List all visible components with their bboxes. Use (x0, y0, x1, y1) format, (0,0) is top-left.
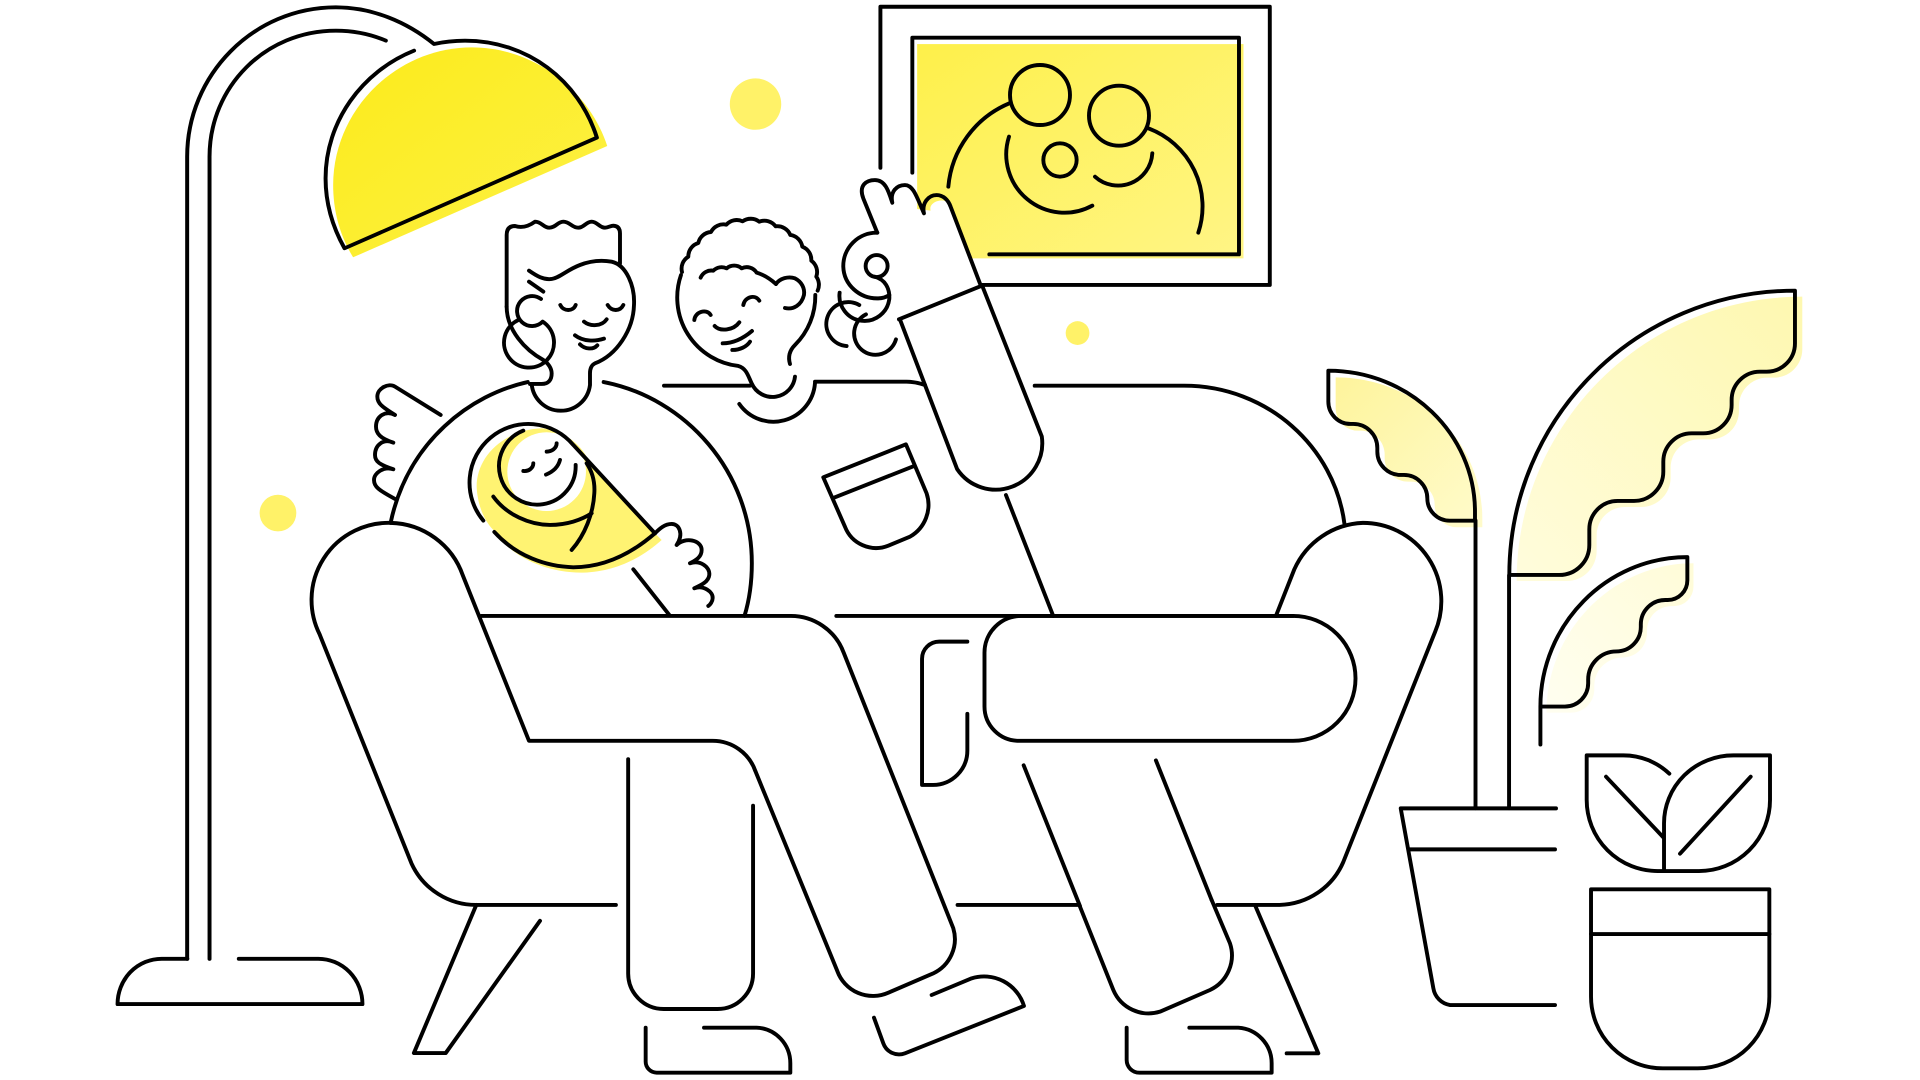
baby in swaddle (374, 385, 713, 615)
stems (1476, 520, 1509, 808)
first parent head (504, 222, 634, 411)
lamp arc and shade outline (187, 7, 597, 959)
tall plant (1328, 291, 1802, 808)
feet of first parent (646, 976, 1024, 1073)
raised hand and arm (826, 180, 1042, 490)
picture frame (880, 7, 1270, 285)
supporting hand (374, 385, 441, 499)
tall plant pot (1401, 808, 1556, 1005)
forearm line (633, 569, 669, 615)
leaf shadows (1336, 297, 1802, 581)
swaddle and face lines (470, 424, 655, 567)
chair leg left (414, 905, 540, 1053)
second parent shin and foot, sofa leg (1024, 760, 1318, 1073)
decorative yellow dots (260, 78, 1089, 531)
second parent head (664, 219, 925, 422)
family drawing in picture (912, 38, 1239, 254)
armchair and first parent thigh (312, 523, 955, 1053)
arm white cover (857, 201, 1041, 463)
forearm (900, 285, 1042, 490)
small pot (1591, 889, 1769, 1068)
leaf outlines (1328, 291, 1795, 575)
lamp shade fill (333, 47, 607, 257)
hand fingers and wrist (826, 180, 981, 355)
small leaf outline (1540, 557, 1687, 744)
swaddle yellow (477, 428, 662, 573)
first parent leg (628, 759, 753, 1009)
picture yellow panel (917, 44, 1243, 258)
sofa and second parent thigh (836, 386, 1441, 905)
holding hand (655, 524, 713, 606)
small leaf fill (1547, 563, 1693, 713)
floor lamp (118, 7, 607, 1004)
lamp base (118, 959, 362, 1004)
small plant leaves (1587, 755, 1770, 871)
first parent torso (391, 382, 752, 616)
baby face white (507, 432, 586, 511)
plant pots (1401, 755, 1770, 1068)
frame outlines (880, 7, 1270, 285)
shirt pocket and torso line (823, 444, 1053, 616)
